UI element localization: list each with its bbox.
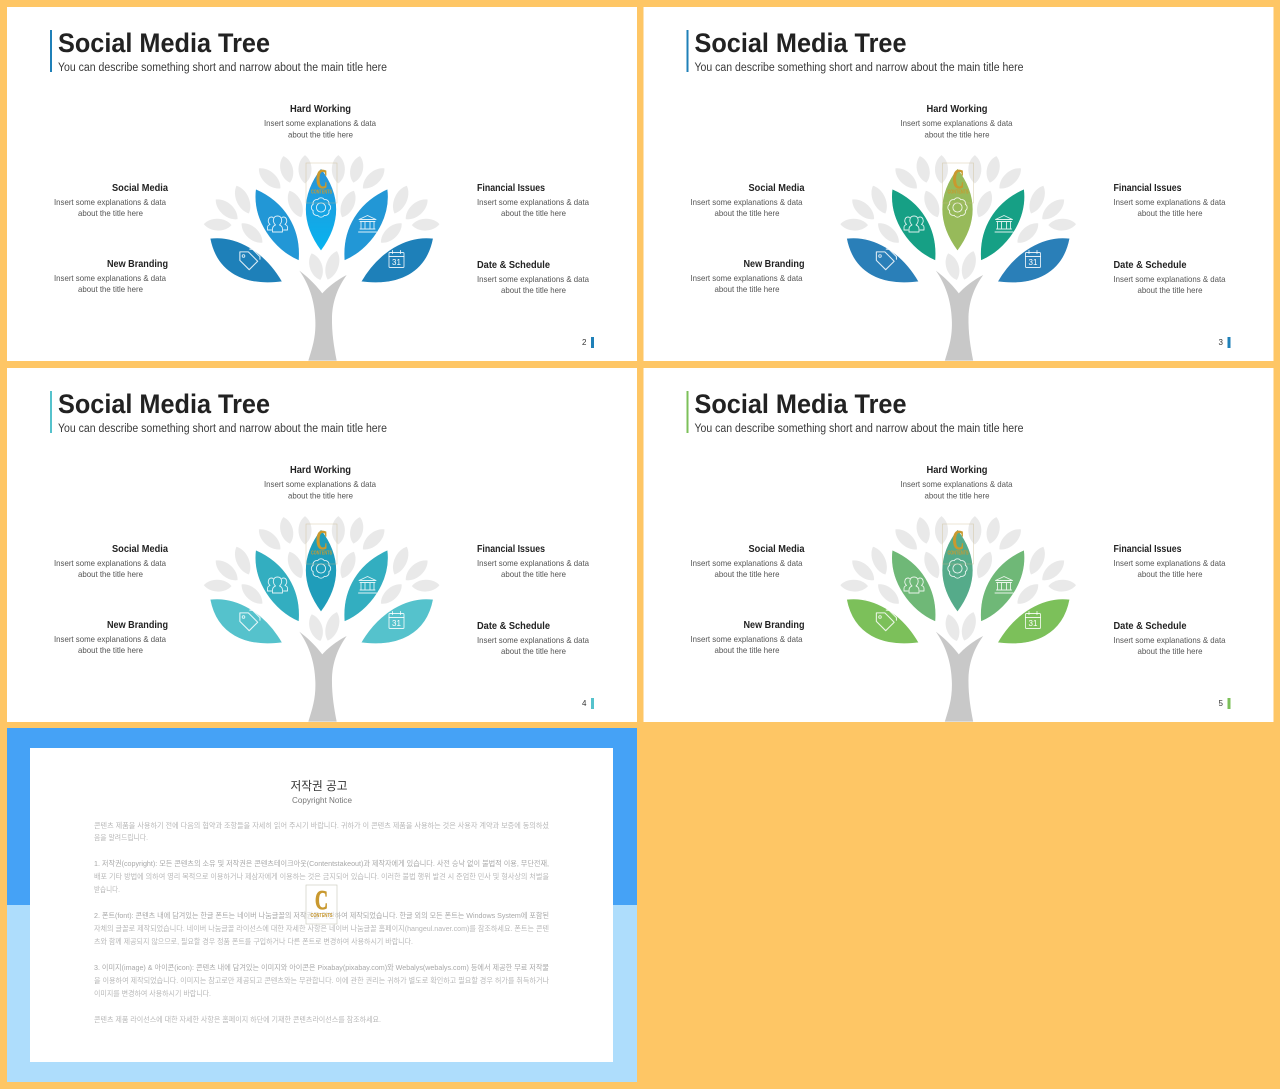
label: Hard Working: about the title here <box>288 490 353 500</box>
label: New Branding <box>690 259 804 294</box>
label: Social Media: Social Media <box>112 183 168 194</box>
tree illustration <box>204 155 440 361</box>
clause 1: 1. 저작권(copyright): 모든 콘텐츠의 소유 및 저작권은 콘텐츠테이크아웃(Contentstakeout)과 제작자에게 있습니다. 사전 승낙 없이 불법적 이용, 무단전재, <box>94 859 549 868</box>
label: Date & Schedule <box>477 621 589 656</box>
icon: gear <box>311 198 331 217</box>
label: Social Media <box>690 544 805 579</box>
label: Date & Schedule: Date & Schedule <box>1114 621 1187 632</box>
icon: calendar: 31 <box>392 258 401 267</box>
label: Hard Working <box>900 465 1013 500</box>
label: Date & Schedule: Insert some explanations & data <box>477 274 589 284</box>
title block: You can describe something short and narrow about the main title here <box>58 62 387 74</box>
watermark logo <box>306 163 337 203</box>
label: Financial Issues: about the title here <box>1138 569 1203 579</box>
title block <box>50 28 387 74</box>
icon: gear <box>948 198 967 217</box>
clause 2 <box>94 911 549 946</box>
page number: 4 <box>582 699 587 708</box>
page number <box>582 337 594 348</box>
label: New Branding <box>54 620 168 655</box>
title block: Social Media Tree <box>58 28 270 58</box>
watermark logo: C <box>952 164 964 194</box>
label: Financial Issues: Financial Issues <box>1114 183 1182 194</box>
label: Date & Schedule <box>1114 621 1226 656</box>
title block <box>686 389 1024 435</box>
label: Social Media: Social Media <box>748 183 805 194</box>
label: Social Media: about the title here <box>78 569 143 579</box>
icon: tag <box>872 248 898 270</box>
icon: tag <box>236 248 261 270</box>
icon: calendar <box>389 612 404 628</box>
label: Date & Schedule: about the title here <box>1138 646 1203 656</box>
label: Financial Issues <box>477 183 589 218</box>
icon: tag <box>236 609 261 631</box>
label: Date & Schedule: Insert some explanations & data <box>1114 274 1226 284</box>
watermark logo: C <box>952 525 964 555</box>
clause 3: 이미지를 변경하여 사용하시기 바랍니다. <box>94 989 211 998</box>
label: New Branding: about the title here <box>714 284 780 294</box>
label: New Branding: about the title here <box>78 645 143 655</box>
intro text: 콘텐츠 제품을 사용하기 전에 다음의 협약과 조항들을 자세히 읽어 주시기 바랍니다. 귀하가 이 콘텐츠 제품을 사용하는 것은 사용자 계약과 보증에 동의하셨 <box>94 821 549 830</box>
clause 1 <box>94 859 549 894</box>
label: Hard Working <box>264 465 376 500</box>
label: New Branding: about the title here <box>714 645 780 655</box>
icon: bank <box>358 576 376 593</box>
title block <box>50 389 387 435</box>
icon: calendar: 31 <box>1029 258 1038 267</box>
label: Hard Working: Insert some explanations & data <box>264 118 376 128</box>
label: Date & Schedule: Date & Schedule <box>477 621 550 632</box>
clause 3: 3. 이미지(image) & 아이콘(icon): 콘텐츠 내에 담겨있는 이미지와 아이콘은 Pixabay(pixabay.com)와 Webalys(webalys.com) 등에서 제공한 무료 저작물 <box>94 963 549 972</box>
label: New Branding <box>54 259 168 294</box>
page number <box>1218 337 1230 348</box>
page number: 3 <box>1218 338 1224 347</box>
clause 1: 배포 기타 방법에 의하여 영리 목적으로 이용하거나 제삼자에게 이용하는 것은 금지되어 있습니다. 이러한 불법 행위 발견 시 준엄한 민사 및 형사상의 처벌을 <box>94 872 549 881</box>
title block <box>686 28 1024 74</box>
watermark logo: CONTENTS <box>310 913 333 919</box>
clause 3 <box>94 963 549 998</box>
label: Financial Issues: Insert some explanations & data <box>1114 558 1226 568</box>
label: Date & Schedule: about the title here <box>1138 285 1203 295</box>
icon: tag <box>872 609 898 631</box>
label: Financial Issues: Financial Issues <box>477 544 545 555</box>
label: New Branding: Insert some explanations & data <box>54 273 166 283</box>
watermark logo: C <box>316 164 328 194</box>
watermark logo: CONTENTS <box>311 550 333 556</box>
panel: copyright notice <box>7 728 637 1082</box>
label: Hard Working: Insert some explanations & data <box>900 118 1013 128</box>
clause 2: 츠와 함께 제공되지 않으므로, 필요할 경우 정품 폰트를 구입하거나 다른 폰트로 변경하여 사용하시기 바랍니다. <box>94 937 413 946</box>
label: Date & Schedule: Date & Schedule <box>477 260 550 271</box>
watermark logo: CONTENTS <box>948 190 969 196</box>
label: Date & Schedule <box>477 260 589 295</box>
label: Financial Issues: Insert some explanations & data <box>477 197 589 207</box>
label: Date & Schedule: Insert some explanations & data <box>1114 635 1226 645</box>
icon: people <box>268 216 288 232</box>
icon: calendar <box>1026 612 1040 628</box>
watermark logo <box>942 524 974 564</box>
title block: You can describe something short and narrow about the main title here <box>58 423 387 435</box>
title block: Social Media Tree <box>694 28 906 58</box>
icon: bank <box>358 216 376 232</box>
label: Social Media: Insert some explanations & data <box>690 197 803 207</box>
watermark logo: C <box>316 525 328 555</box>
label: Financial Issues: about the title here <box>501 208 566 218</box>
label: New Branding: New Branding <box>107 620 168 631</box>
icon: calendar: 31 <box>392 619 401 628</box>
heading: copyright notice: 저작권 공고 <box>290 779 348 793</box>
icon: gear <box>311 559 331 578</box>
label: Date & Schedule: about the title here <box>501 285 566 295</box>
panel: slide 4 teal <box>7 368 637 722</box>
label: Hard Working <box>264 104 376 140</box>
label: Social Media: about the title here <box>78 208 143 218</box>
label: Social Media: about the title here <box>714 569 780 579</box>
clause 1: 받습니다. <box>94 885 120 894</box>
icon: calendar <box>1026 250 1040 268</box>
label: New Branding: Insert some explanations & data <box>54 634 166 644</box>
clause 2: 2. 폰트(font): 콘텐츠 내에 담겨있는 한글 폰트는 네이버 나눔글꼴의 저작권을 기반하여 제작되었습니다. 한글 외의 모든 폰트는 Windows System에 포함된 <box>94 911 549 920</box>
watermark logo: CONTENTS <box>311 190 333 196</box>
label: Financial Issues: Financial Issues <box>1114 544 1182 555</box>
label: Hard Working <box>900 104 1013 140</box>
watermark logo <box>306 885 337 924</box>
panel: slide 2 blue <box>7 7 637 361</box>
label: New Branding: New Branding <box>744 620 804 631</box>
clause 3: 을 이용하여 제작되었습니다. 이미지는 참고로만 제공되고 콘텐츠와는 무관합니다. 이에 관한 권리는 귀하가 별도로 확인하고 필요할 경우 허가를 취득하거나 <box>94 976 549 985</box>
closing note: 콘텐츠 제품 라이선스에 대한 자세한 사항은 홈페이지 하단에 기재한 콘텐츠라이선스를 참조하세요. <box>94 1015 381 1024</box>
title block: Social Media Tree <box>58 389 270 419</box>
label: New Branding: New Branding <box>107 259 168 270</box>
label: Hard Working: Hard Working <box>926 104 988 115</box>
label: Social Media: about the title here <box>714 208 780 218</box>
tree illustration <box>204 516 440 722</box>
label: Social Media: Social Media <box>112 544 168 555</box>
icon: calendar: 31 <box>1029 619 1038 628</box>
heading: copyright notice: Copyright Notice <box>292 795 352 805</box>
label: New Branding: Insert some explanations & data <box>690 273 803 283</box>
label: Hard Working: Hard Working <box>290 104 351 115</box>
title block: You can describe something short and narrow about the main title here <box>694 423 1024 435</box>
label: Hard Working: Hard Working <box>926 465 988 476</box>
icon: bank <box>995 576 1013 593</box>
tree illustration <box>840 516 1076 722</box>
panel: slide 5 green <box>644 368 1274 722</box>
label: New Branding: about the title here <box>78 284 143 294</box>
label: Financial Issues <box>477 544 589 579</box>
label: New Branding <box>690 620 804 655</box>
label: Social Media <box>54 544 168 579</box>
page number <box>582 698 594 709</box>
label: Date & Schedule: Date & Schedule <box>1114 260 1187 271</box>
label: Social Media: Social Media <box>748 544 805 555</box>
icon: people <box>904 577 924 593</box>
heading: copyright notice <box>290 779 352 805</box>
label: Date & Schedule: about the title here <box>501 646 566 656</box>
tree illustration <box>840 155 1076 361</box>
page number: 5 <box>1218 699 1224 708</box>
label: Hard Working: about the title here <box>924 490 990 500</box>
label: Financial Issues: about the title here <box>1138 208 1203 218</box>
icon: people <box>904 216 924 232</box>
page number: 2 <box>582 338 587 347</box>
label: Financial Issues: Insert some explanations & data <box>477 558 589 568</box>
icon: calendar <box>389 250 404 268</box>
label: Social Media: Insert some explanations & data <box>690 558 803 568</box>
label: Financial Issues: Insert some explanations & data <box>1114 197 1226 207</box>
label: Social Media: Insert some explanations & data <box>54 197 166 207</box>
icon: people <box>268 577 288 593</box>
label: New Branding: Insert some explanations & data <box>690 634 803 644</box>
label: Financial Issues <box>1114 544 1226 579</box>
watermark logo <box>306 524 337 564</box>
watermark logo <box>942 163 974 203</box>
title block: Social Media Tree <box>694 389 906 419</box>
label: Financial Issues: Financial Issues <box>477 183 545 194</box>
label: Hard Working: Hard Working <box>290 465 351 476</box>
watermark logo: C <box>315 885 328 915</box>
label: Hard Working: about the title here <box>288 130 353 140</box>
label: Hard Working: about the title here <box>924 130 990 140</box>
panel: slide 3 multicolor <box>644 7 1274 361</box>
label: Financial Issues: about the title here <box>501 569 566 579</box>
intro text <box>94 821 549 842</box>
clause 2: 자체의 글꼴로 제작되었습니다. 네이버 나눔글꼴 라이선스에 대한 자세한 사항은 네이버 나눔글꼴 홈페이지(hangeul.naver.com)를 참조하세요. 폰트는 콘텐 <box>94 924 549 933</box>
icon: bank <box>995 216 1013 232</box>
label: Social Media: Insert some explanations & data <box>54 558 166 568</box>
label: Date & Schedule <box>1114 260 1226 295</box>
label: New Branding: New Branding <box>744 259 804 270</box>
title block: You can describe something short and narrow about the main title here <box>694 62 1024 74</box>
label: Social Media <box>54 183 168 218</box>
intro text: 음을 알려드립니다. <box>94 833 148 842</box>
label: Hard Working: Insert some explanations & data <box>900 479 1013 489</box>
icon: gear <box>948 559 967 578</box>
label: Date & Schedule: Insert some explanations & data <box>477 635 589 645</box>
label: Financial Issues <box>1114 183 1226 218</box>
label: Hard Working: Insert some explanations & data <box>264 479 376 489</box>
label: Social Media <box>690 183 805 218</box>
watermark logo: CONTENTS <box>948 550 969 556</box>
page number <box>1218 698 1230 709</box>
